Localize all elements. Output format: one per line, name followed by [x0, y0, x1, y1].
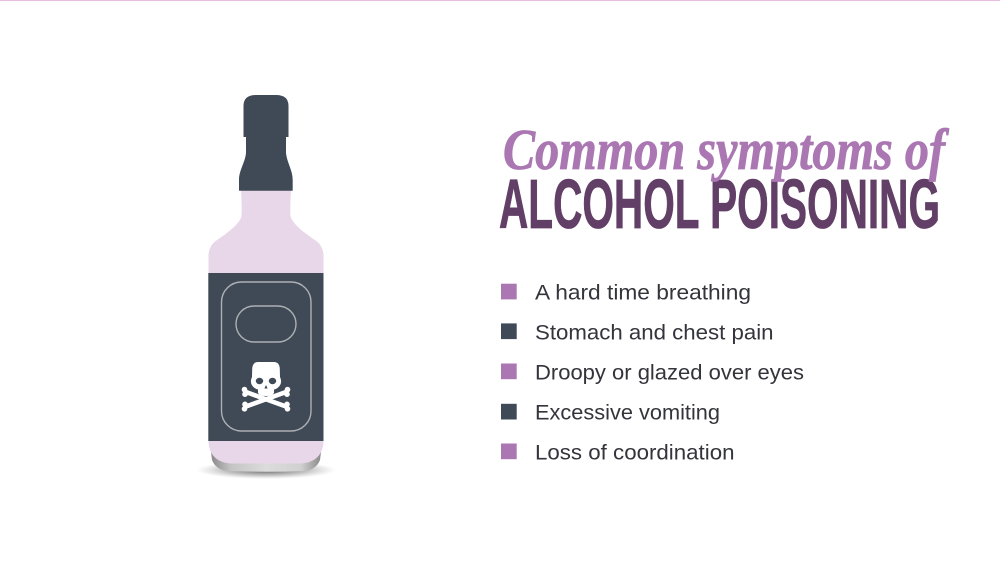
- bottle body: [208, 190, 324, 464]
- bottle cap: [239, 95, 293, 191]
- item: vomiting: Excessive vomiting: [535, 401, 720, 424]
- icon: poison bottle: [196, 95, 336, 479]
- symptom list: [501, 281, 804, 464]
- heading: [499, 117, 950, 243]
- bottle label: [208, 273, 324, 441]
- bottle shadow: [196, 461, 336, 479]
- item: stomach: Stomach and chest pain: [535, 321, 774, 344]
- label inner frame: [222, 282, 311, 431]
- item: coordination: Loss of coordination: [535, 441, 734, 464]
- item: eyes: Droopy or glazed over eyes: [535, 361, 804, 384]
- icon: skull and crossbones: [242, 362, 290, 412]
- bottle base: [211, 452, 321, 472]
- label oval: [236, 306, 296, 342]
- item: breathing: A hard time breathing: [535, 281, 751, 304]
